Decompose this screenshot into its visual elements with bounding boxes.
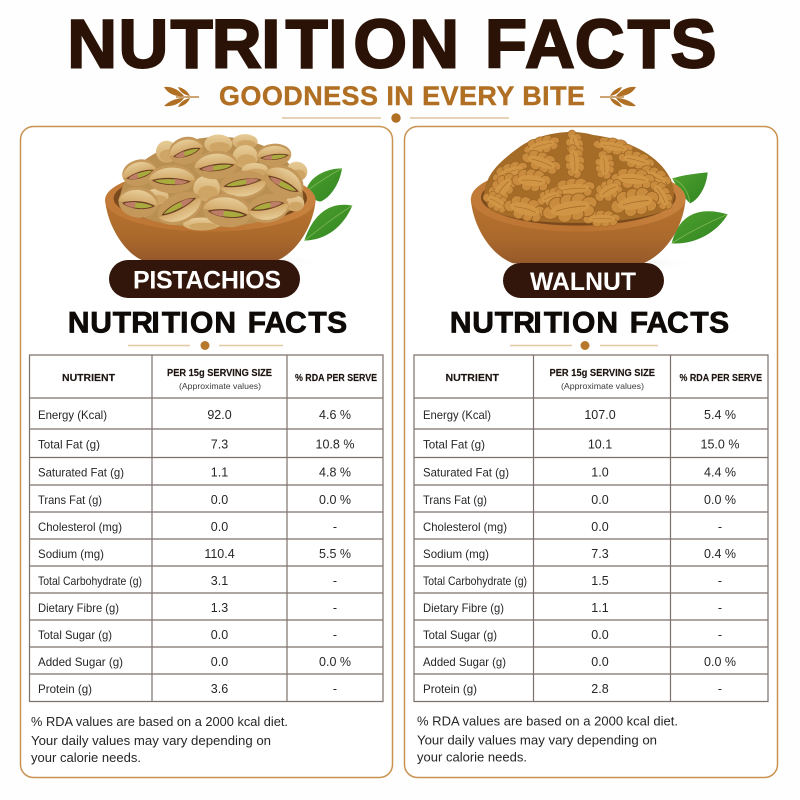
row: dietary fibre: - <box>718 601 722 615</box>
table header: PER 15g SERVING SIZE <box>167 367 272 379</box>
row: added sugar: Added Sugar (g) <box>423 655 506 669</box>
row: protein: 3.6 <box>211 682 228 696</box>
row: dietary fibre: Dietary Fibre (g) <box>423 601 504 615</box>
divider <box>510 341 658 350</box>
table header: (Approximate values) <box>179 381 261 391</box>
row: energy: 4.6 % <box>319 408 351 422</box>
row: sodium: 0.4 % <box>704 547 736 561</box>
table header: PER 15g SERVING SIZE <box>550 367 655 379</box>
image: bowl of pistachios <box>105 133 352 272</box>
footnote: % RDA values are based on a 2000 kcal diet. <box>417 714 678 728</box>
row: cholesterol: - <box>718 520 722 534</box>
row: total fat: Total Fat (g) <box>423 438 485 452</box>
row: energy: Energy (Kcal) <box>423 408 491 422</box>
table header <box>446 367 762 391</box>
row: total sugar: 0.0 <box>211 628 228 642</box>
row: cholesterol <box>423 520 722 534</box>
footnote <box>417 714 678 764</box>
heading: NUTRITION <box>450 306 618 340</box>
row: added sugar: 0.0 <box>211 655 228 669</box>
row: protein: Protein (g) <box>38 682 92 696</box>
row: sodium: Sodium (mg) <box>423 547 489 561</box>
row: total sugar: Total Sugar (g) <box>423 628 497 642</box>
row: trans fat: 0.0 % <box>319 493 351 507</box>
row: cholesterol: Cholesterol (mg) <box>38 520 122 534</box>
heading: NUTRITION <box>68 306 236 340</box>
panel: pistachios <box>20 126 392 778</box>
row: dietary fibre: 1.1 <box>591 601 609 615</box>
heading: FACTS <box>248 306 347 340</box>
table: walnut <box>414 355 768 702</box>
row: trans fat: 0.0 <box>211 493 228 507</box>
row: added sugar <box>423 655 736 669</box>
header divider <box>282 113 509 123</box>
row: cholesterol <box>38 520 337 534</box>
row: protein: Protein (g) <box>423 682 477 696</box>
row: dietary fibre: 1.3 <box>211 601 228 615</box>
row: trans fat: 0.0 <box>591 493 609 507</box>
row: protein <box>38 682 337 696</box>
row: total carbohydrate: - <box>718 574 722 588</box>
row: total sugar <box>38 628 337 642</box>
title: FACTS <box>485 6 717 82</box>
footnote: % RDA values are based on a 2000 kcal diet. <box>31 714 288 729</box>
row: total fat: Total Fat (g) <box>38 438 100 452</box>
row: energy: Energy (Kcal) <box>38 408 107 422</box>
row: energy: 92.0 <box>207 408 232 422</box>
footnote: your calorie needs. <box>417 750 527 764</box>
footnote: Your daily values may vary depending on <box>417 732 657 748</box>
row: total fat <box>423 438 739 452</box>
row: energy <box>423 408 736 422</box>
table header: NUTRIENT <box>446 372 500 384</box>
row: total carbohydrate: 3.1 <box>211 574 228 588</box>
row: total fat: 15.0 % <box>701 438 739 452</box>
subtitle: GOODNESS IN EVERY BITE <box>219 81 585 111</box>
row: saturated fat: 4.4 % <box>704 466 736 480</box>
row: added sugar: 0.0 % <box>704 655 736 669</box>
row: trans fat: Trans Fat (g) <box>423 493 487 507</box>
row: total carbohydrate: - <box>333 574 337 588</box>
row: added sugar: 0.0 <box>591 655 609 669</box>
table header: (Approximate values) <box>561 381 644 391</box>
row: total fat: 7.3 <box>211 438 228 452</box>
row: total carbohydrate: 1.5 <box>591 574 609 588</box>
row: trans fat <box>423 493 736 507</box>
row: total sugar: Total Sugar (g) <box>38 628 112 642</box>
label pill: walnut <box>503 263 664 298</box>
row: saturated fat: Saturated Fat (g) <box>38 466 124 480</box>
row: protein: - <box>718 682 722 696</box>
row: saturated fat <box>38 466 351 480</box>
row: energy: 5.4 % <box>704 408 736 422</box>
row: cholesterol: Cholesterol (mg) <box>423 520 507 534</box>
row: trans fat: Trans Fat (g) <box>38 493 102 507</box>
panel: walnut <box>404 126 778 778</box>
row: total fat <box>38 438 354 452</box>
row: total carbohydrate: Total Carbohydrate (g) <box>38 574 142 588</box>
row: dietary fibre: - <box>333 601 337 615</box>
row: cholesterol: 0.0 <box>211 520 228 534</box>
row: dietary fibre <box>38 601 337 615</box>
row: total sugar <box>423 628 722 642</box>
row: energy <box>38 408 351 422</box>
row: total carbohydrate <box>38 574 337 588</box>
footnote <box>31 714 288 765</box>
row: sodium: 110.4 <box>204 547 235 561</box>
row: total sugar: - <box>718 628 722 642</box>
row: sodium: 7.3 <box>591 547 609 561</box>
table header: % RDA PER SERVE <box>680 372 762 384</box>
row: sodium: Sodium (mg) <box>38 547 104 561</box>
row: total carbohydrate: Total Carbohydrate (g) <box>423 574 527 588</box>
row: dietary fibre <box>423 601 722 615</box>
label pill: walnut: WALNUT <box>530 268 636 296</box>
row: protein: 2.8 <box>591 682 609 696</box>
row: saturated fat: 1.1 <box>211 466 228 480</box>
icon: right laurel <box>600 87 636 107</box>
row: total fat: 10.8 % <box>316 438 354 452</box>
row: trans fat <box>38 493 351 507</box>
row: saturated fat: 4.8 % <box>319 466 351 480</box>
icon: left laurel <box>164 87 199 107</box>
title: NUTRITION <box>67 6 459 82</box>
row: protein <box>423 682 722 696</box>
row: sodium <box>38 547 351 561</box>
image: bowl of walnuts <box>471 128 728 273</box>
row: sodium: 5.5 % <box>319 547 351 561</box>
row: total sugar: 0.0 <box>591 628 609 642</box>
heading: FACTS <box>630 306 729 340</box>
footnote: your calorie needs. <box>31 750 141 765</box>
row: saturated fat: 1.0 <box>591 466 609 480</box>
row: total fat: 10.1 <box>588 438 612 452</box>
row: total carbohydrate <box>423 574 722 588</box>
label pill: pistachios <box>109 260 300 298</box>
table header: % RDA PER SERVE <box>295 372 377 384</box>
table: pistachios <box>30 355 383 702</box>
row: cholesterol: 0.0 <box>591 520 609 534</box>
row: added sugar: Added Sugar (g) <box>38 655 123 669</box>
table header <box>62 367 377 391</box>
row: saturated fat: Saturated Fat (g) <box>423 466 509 480</box>
row: added sugar: 0.0 % <box>319 655 351 669</box>
row: sodium <box>423 547 736 561</box>
row: total sugar: - <box>333 628 337 642</box>
row: protein: - <box>333 682 337 696</box>
row: energy: 107.0 <box>584 408 616 422</box>
footnote: Your daily values may vary depending on <box>31 733 271 748</box>
divider <box>128 341 283 350</box>
table header: NUTRIENT <box>62 372 116 384</box>
row: trans fat: 0.0 % <box>704 493 736 507</box>
row: cholesterol: - <box>333 520 337 534</box>
row: dietary fibre: Dietary Fibre (g) <box>38 601 119 615</box>
row: added sugar <box>38 655 351 669</box>
label pill: pistachios: PISTACHIOS <box>133 266 281 294</box>
row: saturated fat <box>423 466 736 480</box>
